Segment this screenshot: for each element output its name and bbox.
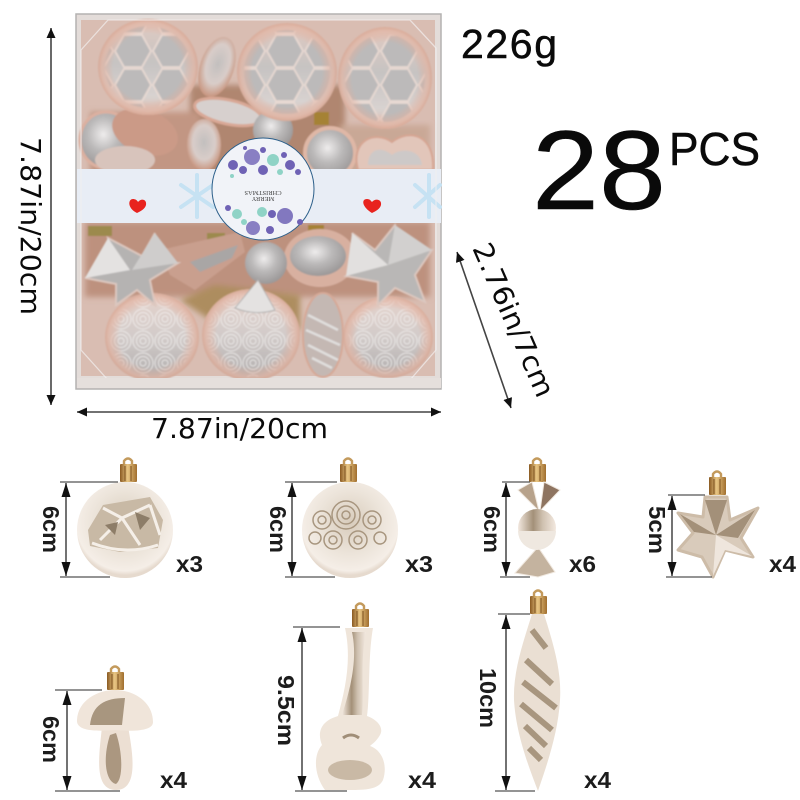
piece count: PCS (669, 123, 760, 175)
weight label: 226g (461, 21, 557, 67)
ornament 2: ring ball: 6cm (265, 506, 291, 553)
icon: heart right (363, 199, 381, 213)
icon: snowflake left (181, 175, 213, 217)
snowflake cluster bottom (225, 205, 303, 235)
icon: heart left (129, 199, 146, 213)
panel: product box (76, 14, 441, 389)
round label (212, 138, 314, 240)
ornament: spiral in box (303, 293, 343, 377)
ornament: ring ball 2 (202, 280, 300, 381)
box inner tone (81, 20, 435, 376)
icon: snowflake right (415, 175, 440, 217)
ornament 2: ring ball: x3 (405, 551, 433, 577)
ornament 6: rabbit figure: 9.5cm (273, 675, 299, 746)
ornament: silver star left (85, 233, 178, 305)
ornament 7: spiral drop: 10cm (475, 668, 501, 728)
ornament 5: mushroom: 6cm (38, 716, 64, 763)
ornament 2: ring ball (265, 458, 433, 578)
ornament 7: spiral drop (475, 590, 611, 793)
piece count (532, 108, 760, 233)
ornament: faceted ball 2 (237, 23, 337, 121)
ornament 5: mushroom (38, 666, 187, 793)
ornament: ring ball 1 (105, 293, 199, 381)
label text: MERRY (251, 195, 274, 202)
box corner highlights (81, 20, 436, 380)
ornament 6: rabbit figure: x4 (408, 767, 436, 793)
cap (120, 458, 137, 482)
ornament 3: candy (479, 458, 596, 577)
ornament: faceted ball 3 (338, 27, 432, 129)
ornament 4: star (644, 472, 796, 577)
ornament 6: rabbit figure (273, 604, 436, 793)
tangled ornaments upper middle (80, 32, 433, 178)
ornament 1: faceted ball (38, 458, 203, 578)
ornament 1: faceted ball: 6cm (38, 506, 64, 553)
ornament 7: spiral drop: x4 (584, 767, 611, 793)
dimension arrow: box width: 7.87in/20cm (151, 413, 328, 445)
ornament 3: candy: 6cm (479, 506, 505, 553)
lower middle ornaments (85, 222, 430, 330)
dimension arrow: box height: 7.87in/20cm (14, 137, 46, 315)
label text: CHRISTMAS (244, 189, 282, 196)
box base (76, 14, 441, 389)
label text (244, 189, 282, 202)
ornament: faceted ball 1 (98, 19, 198, 115)
ornament: silver star right (346, 225, 432, 305)
paper band (77, 169, 441, 223)
quantity: x3 (176, 551, 203, 577)
dimension arrow: box depth: 2.76in/7cm (466, 238, 561, 402)
snowflake cluster top (228, 146, 301, 178)
ornament: ring ball 3 (343, 296, 433, 378)
box bottom rim (77, 378, 441, 388)
ornament 5: mushroom: x4 (160, 767, 187, 793)
ball (77, 482, 173, 578)
ornament 4: star: x4 (769, 551, 796, 577)
dimension (60, 482, 118, 577)
ornament 3: candy: x6 (569, 551, 596, 577)
piece count: 28 (532, 108, 666, 233)
ornament 4: star: 5cm (644, 506, 670, 554)
